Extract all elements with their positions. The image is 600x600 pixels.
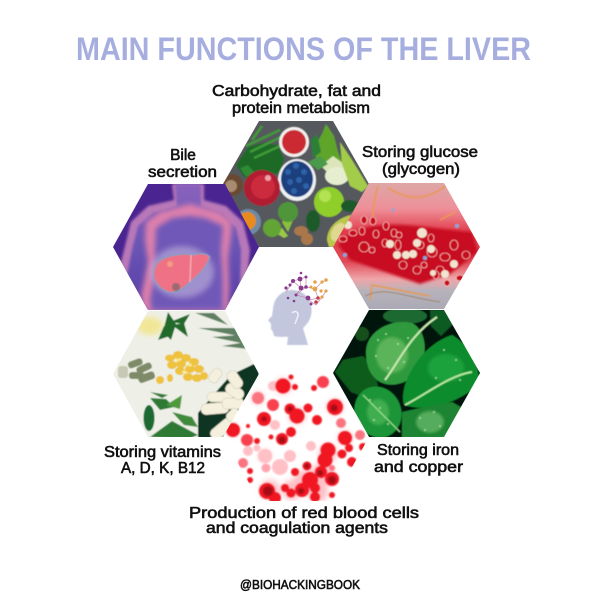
pale cells xyxy=(243,381,316,475)
pomegranate xyxy=(244,170,280,206)
hexagon: body with liver xyxy=(110,180,262,314)
orange vessels xyxy=(365,184,455,302)
liver glow xyxy=(150,246,214,298)
softgel capsules xyxy=(156,351,208,384)
green apple xyxy=(314,187,344,217)
lower plant xyxy=(144,392,198,439)
label: bile secretion: secretion xyxy=(148,164,217,181)
pecans xyxy=(294,226,313,245)
label: storing iron and copper: Storing iron xyxy=(377,442,459,459)
white capsules xyxy=(201,367,246,442)
head with neural network icon xyxy=(268,272,328,345)
lower right spinach leaf xyxy=(401,402,461,437)
dark leaves xyxy=(306,200,359,232)
upper leaves xyxy=(158,312,190,340)
label: production of red blood cells: and coagulation agents xyxy=(206,520,388,537)
yellow flower glow xyxy=(137,317,163,335)
label: carbohydrate, fat and protein metabolism: Carbohydrate, fat and xyxy=(212,83,381,100)
hexagon: red blood cells xyxy=(220,370,372,505)
background leaves xyxy=(335,308,453,400)
saturated cells xyxy=(226,374,367,504)
bok choy xyxy=(308,124,368,192)
label: storing glucose: (glycogen) xyxy=(382,161,460,178)
label: bile secretion: Bile xyxy=(170,147,196,164)
head silhouette xyxy=(268,290,312,345)
title: MAIN FUNCTIONS OF THE LIVER xyxy=(76,31,531,67)
large upper spinach leaf xyxy=(366,317,437,385)
dark leaf under capsules xyxy=(197,364,259,437)
herbs and green beans xyxy=(236,126,284,185)
torso and arms xyxy=(116,184,250,312)
dark cell centres xyxy=(262,404,338,496)
hexagon: spinach leaves xyxy=(333,310,480,437)
footer handle: @BIOHACKINGBOOK xyxy=(240,577,360,592)
hexagon: glucose storage, red cells xyxy=(330,180,482,312)
label: storing vitamins: A, D, K, B12 xyxy=(121,460,205,477)
goji berry bowl xyxy=(279,127,309,157)
glycogen spheres xyxy=(344,221,458,278)
lower left spinach leaf xyxy=(354,386,402,437)
label: storing glucose: Storing glucose xyxy=(362,144,478,161)
deep red band xyxy=(338,225,478,284)
label: storing vitamins: Storing vitamins xyxy=(104,444,221,461)
right spinach leaf xyxy=(403,335,479,408)
network connections xyxy=(286,277,326,305)
ear xyxy=(292,312,298,324)
blueberry bowl xyxy=(278,159,316,201)
broccoli xyxy=(263,202,298,238)
label: carbohydrate, fat and protein metabolism: protein metabolism xyxy=(232,100,370,117)
orange network nodes xyxy=(310,278,328,304)
soft halos xyxy=(227,378,352,502)
orange sauce bowl xyxy=(240,208,262,235)
water droplets xyxy=(369,333,461,431)
label: production of red blood cells: Production of red blood cells xyxy=(189,505,419,522)
label: storing iron and copper: and copper xyxy=(374,459,463,476)
liver xyxy=(154,254,210,292)
infographic canvas xyxy=(78,37,530,592)
palm leaves xyxy=(195,313,248,349)
nuts bowl xyxy=(221,174,243,196)
red blood cells xyxy=(339,216,470,286)
purple network nodes xyxy=(284,272,312,306)
herbal capsules xyxy=(118,358,156,384)
avocado xyxy=(327,215,351,247)
hexagon: food photo xyxy=(220,118,372,250)
hexagon: vitamins and supplements xyxy=(113,311,259,437)
